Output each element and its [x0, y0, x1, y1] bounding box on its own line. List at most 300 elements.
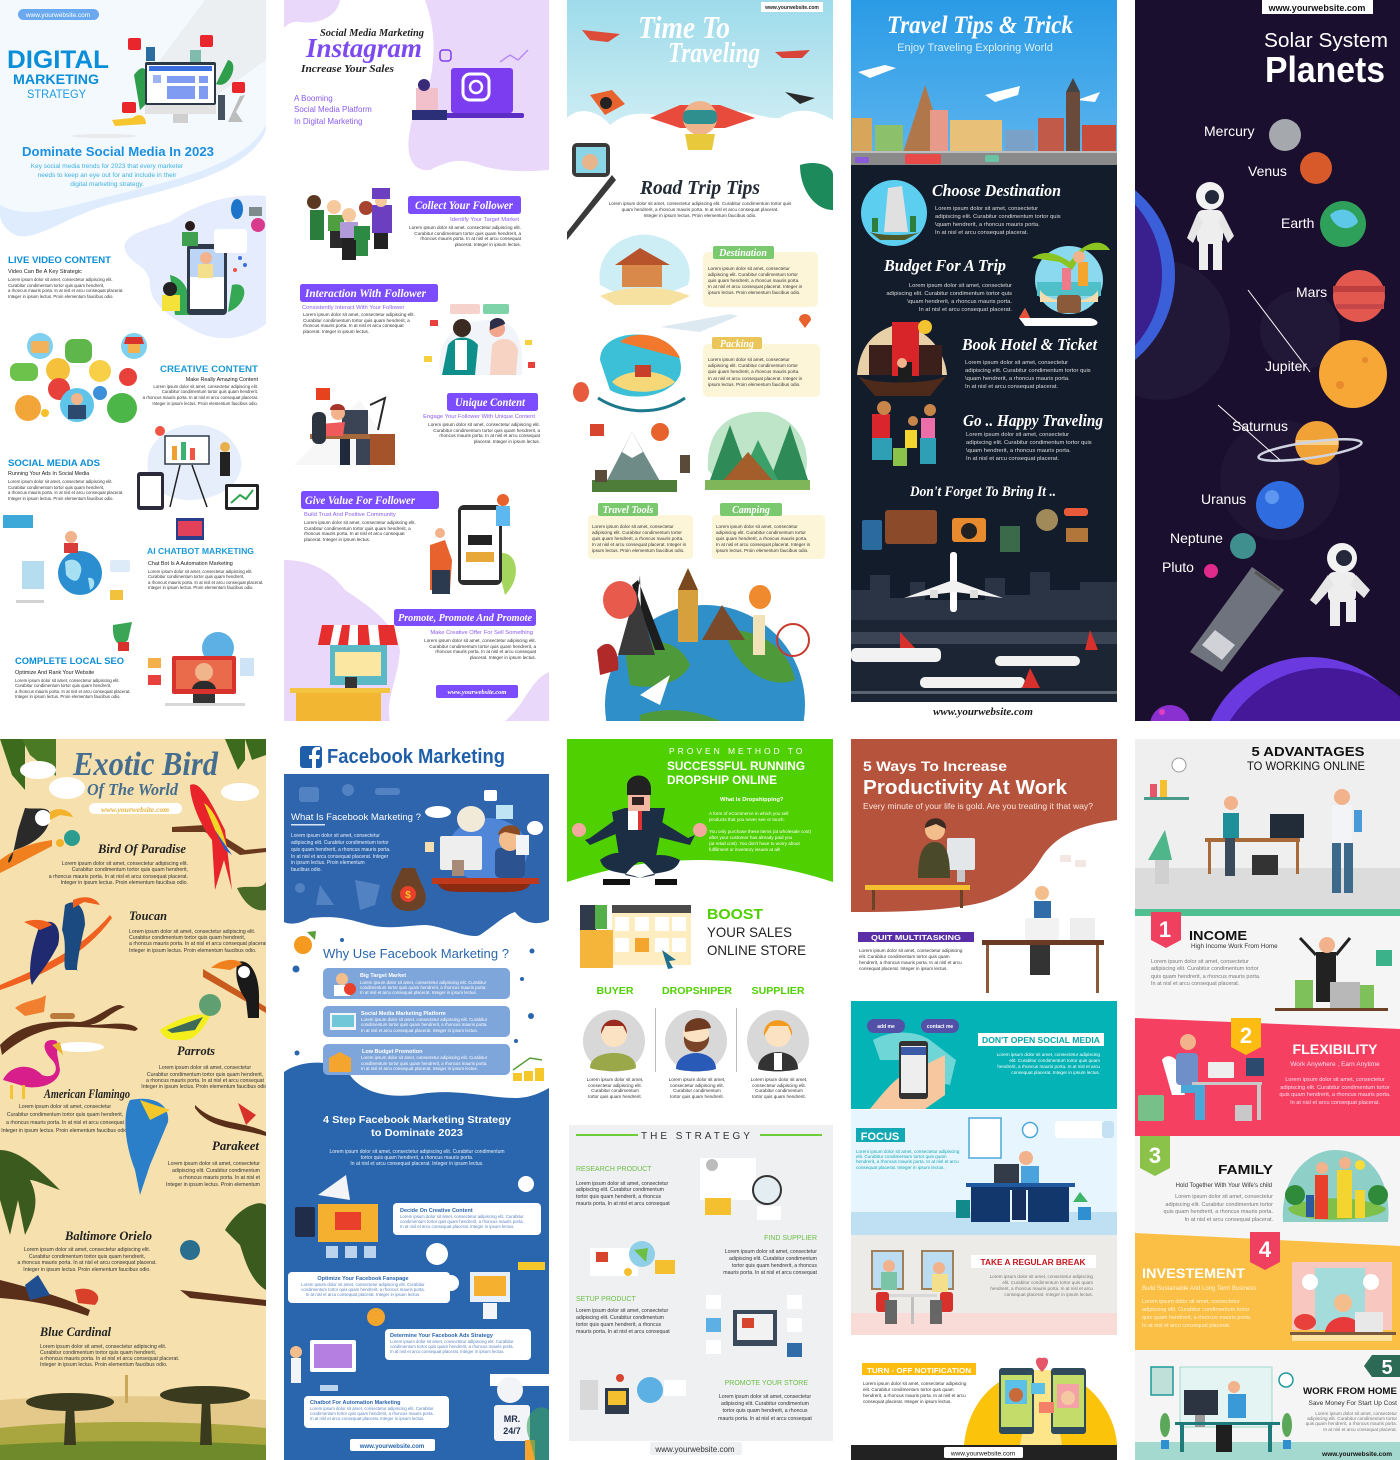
planet: saturn: Saturnus	[1232, 418, 1288, 434]
header text: DROPSHIP ONLINE	[667, 775, 777, 787]
intro text	[294, 94, 372, 126]
road	[851, 151, 1117, 165]
panel: advantages of working online	[1135, 739, 1400, 1460]
section: do not open social media: hendrerit, a rhoncus mauris porta. In at nisl et arcu	[997, 1064, 1100, 1069]
decorative streak	[1218, 290, 1310, 460]
section: do not open social media: DON'T OPEN SOCIAL MEDIA	[982, 1036, 1100, 1045]
illustration: money man	[1275, 937, 1392, 1011]
card: social media platform	[323, 1006, 510, 1037]
header text	[667, 746, 811, 852]
section: live video content: Integer in ipsum lectus. Proin elementum faucibus odio.	[8, 294, 114, 299]
panel: exotic bird	[0, 739, 269, 1460]
section: quit multitasking: hendrerit, a rhoncus mauris porta. In at nisl et arcu	[859, 960, 962, 965]
bar: promote: Promote, Promote And Promote	[398, 612, 532, 624]
step: research product	[576, 1166, 670, 1207]
card: destination: Destination	[718, 248, 767, 259]
role: dropshiper: Lorem ipsum dolor sit amet,	[669, 1077, 725, 1082]
section: income	[1151, 912, 1278, 987]
section: work from home: Lorem ipsum dolor sit amet, consectetur	[1315, 1411, 1397, 1416]
step: choose destination: \quam hendrerit, a rhoncus mauris porta.	[935, 222, 1040, 228]
subtitle and intro: digital marketing strategy.	[70, 181, 144, 188]
card: social media platform: condimentum tortor quis quam hendrerit, a rhoncus mauris porta.	[361, 1022, 487, 1027]
card: chatbot: In at nisl et arcu consequat placerat. Integer in ipsum lectus.	[310, 1416, 424, 1421]
heading: road trip tips: Road Trip Tips	[639, 177, 760, 199]
text: toucan: a rhoncus mauris porta. In at nisl et arcu consequat placerat.	[129, 941, 268, 947]
section: family	[1140, 1136, 1273, 1223]
card: optimize fanspage: condimentum tortor quis quam hendrerit, a rhoncus mauris porta.	[301, 1287, 425, 1292]
header text: after your customer has already paid you	[709, 835, 793, 840]
card: camping: ipsum lectus. Proin elementum faucibus odio.	[716, 548, 808, 553]
section: flexibility: Lorem ipsum dolor sit amet, consectetur	[1285, 1077, 1385, 1083]
subtitle and intro: Dominate Social Media In 2023	[22, 144, 214, 159]
title	[638, 2, 823, 69]
planet: mars	[1296, 270, 1385, 322]
section: live video content: a rhoncus mauris porta. In at nisl et arcu consequat placerat.	[8, 288, 123, 293]
illustration: research	[700, 1158, 781, 1220]
section: turn off notification: hendrerit, a rhoncus mauris porta. In at nisl et arcu	[863, 1393, 966, 1398]
website label: www.yourwebsite.com	[1268, 3, 1365, 13]
step: find supplier: FIND SUPPLIER	[764, 1235, 817, 1242]
heading: 4 step: 4 Step Facebook Marketing Strategy	[323, 1115, 511, 1126]
bird: flamingo	[3, 1040, 63, 1099]
planet: small pink purple	[1150, 705, 1190, 745]
step: budget for a trip: \quam hendrerit, a rhoncus mauris porta.	[907, 299, 1012, 305]
footer website: www.yourwebsite.com	[933, 706, 1033, 718]
section: investement: INVESTEMENT	[1142, 1266, 1246, 1281]
text: what is facebook marketing	[291, 812, 421, 873]
section: creative content: CREATIVE CONTENT	[160, 364, 259, 374]
card: travel tools: ipsum lectus. Proin elementum faucibus odio.	[592, 548, 684, 553]
bar: interaction with follower: Interaction With Follower	[304, 286, 426, 300]
card: optimize fanspage: In at nisl et arcu consequat placerat. Integer in ipsum lectus.	[306, 1292, 420, 1297]
text: parakeet: Parakeet	[212, 1139, 260, 1153]
title: Instagram	[305, 33, 422, 63]
bird: toucans pair	[0, 897, 112, 990]
icons: creative content	[10, 333, 147, 423]
planet: uranus: Uranus	[1201, 491, 1246, 507]
illustration: desk worker	[310, 388, 395, 465]
title: Exotic Bird	[72, 746, 219, 783]
card: chatbot	[304, 1396, 449, 1428]
illustration: globe with landmarks	[597, 568, 809, 805]
card: travel tools: adipiscing elit. Curabitur condimentum tortor	[592, 530, 682, 535]
card: facebook ads strategy: condimentum tortor quis quam hendrerit, a rhoncus mauris porta.	[390, 1344, 514, 1349]
step: research product: mauris porta. In at nisl et arcu consequat	[576, 1201, 670, 1207]
section: social media ads: Curabitur condimentum tortor quis quam hendrerit,	[8, 485, 104, 490]
section: live video content: Lorem ipsum dolor sit amet, consectetur adipiscing elit.	[8, 277, 113, 282]
text: what is facebook marketing: What Is Facebook Marketing ?	[291, 812, 421, 823]
title	[1247, 744, 1365, 773]
intro text: Social Media Platform	[294, 105, 372, 114]
text: unique content: Lorem ipsum dolor sit amet, consectetur adipiscing elit.	[428, 422, 540, 427]
illustration: happy travelers	[872, 401, 936, 466]
bar: unique content: Unique Content	[455, 395, 526, 409]
bar: collect your follower: Collect Your Follower	[415, 198, 513, 212]
card: packing: adipiscing elit. Curabitur condimentum tortor	[708, 363, 798, 368]
card: low budget promotion: Lorem ipsum dolor sit amet, consectetur adipiscing elit. Curabitur	[361, 1055, 488, 1060]
card: destination: adipiscing elit. Curabitur condimentum tortor	[708, 272, 798, 277]
role: dropshiper	[662, 986, 733, 1099]
palms	[0, 1150, 266, 1316]
title	[300, 28, 424, 75]
text: what is facebook marketing: In at nisl et arcu consequat placerat. Integer	[291, 854, 389, 860]
illustration: ads board	[137, 425, 259, 510]
card: facebook ads strategy: In at nisl et arcu consequat placerat. Integer in ipsum lectus.	[390, 1349, 504, 1354]
step: budget for a trip: In at nisl et arcu consequat placerat.	[919, 307, 1012, 313]
step: promote your store: mauris porta. In at nisl et arcu consequat	[718, 1416, 812, 1422]
card: optimize fanspage: Lorem ipsum dolor sit amet, consectetur adipiscing elit. Curabitur	[301, 1282, 425, 1287]
text: toucan: Lorem ipsum dolor sit amet, consectetur adipiscing elit.	[129, 929, 255, 935]
step: promote your store: tortor quis quam hendrerit, a rhoncus	[722, 1408, 808, 1414]
section: social media ads: Running Your Ads In Social Media	[8, 471, 89, 477]
clouds	[567, 110, 833, 155]
text: promote: rhoncus mauris porta. In at nisl et arcu consequat	[435, 649, 537, 654]
step: choose destination: Lorem ipsum dolor sit amet, consectetur	[935, 206, 1038, 212]
illustration: island	[573, 334, 685, 411]
text: parakeet: Integer in ipsum lectus. Proin elementum	[166, 1182, 260, 1188]
illustration: city silhouette with plane	[851, 552, 1117, 620]
step: go happy traveling: \quam hendrerit, a rhoncus mauris porta.	[966, 448, 1071, 454]
section: creative content: Make Really Amazing Content	[186, 377, 258, 383]
section: complete local seo	[15, 656, 130, 699]
step: setup product: mauris porta. In at nisl et arcu consequat	[576, 1329, 670, 1335]
section: live video content: Curabitur condimentum tortor quis quam hendrerit,	[8, 283, 104, 288]
section: family: quis quam hendrerit, a rhoncus mauris porta.	[1164, 1209, 1273, 1215]
branch and nest	[0, 995, 138, 1055]
section: creative content: Lorem ipsum dolor sit amet, consectetur adipiscing elit.	[153, 384, 258, 389]
card: packing: ipsum lectus. Proin elementum faucibus odio.	[708, 382, 800, 387]
section: income: quis quam hendrerit, a rhoncus mauris porta.	[1151, 974, 1261, 980]
text: promote: Curabitur condimentum tortor quis quam hendrerit, a	[429, 644, 536, 649]
illustration: laptop	[412, 50, 528, 120]
title: Enjoy Traveling Exploring World	[897, 42, 1053, 54]
step: find supplier: Lorem ipsum dolor sit amet, consectetur	[725, 1249, 817, 1255]
title: Productivity At Work	[863, 777, 1068, 799]
illustration: home office	[1151, 1367, 1293, 1452]
section: take a regular break: elit. Curabitur condimentum tortor quis quam	[1002, 1280, 1093, 1285]
step: find supplier	[723, 1235, 818, 1276]
role: supplier: Lorem ipsum dolor sit amet,	[751, 1077, 807, 1082]
title: Time To	[638, 9, 730, 45]
text: parakeet	[166, 1139, 261, 1188]
section: investement: adipiscing elit. Curabitur condimentum tortor	[1142, 1307, 1250, 1313]
step: book hotel and ticket: Book Hotel & Ticket	[961, 335, 1098, 354]
clouds	[20, 761, 259, 1052]
monitor illustration	[112, 35, 245, 126]
planet: pluto	[1162, 559, 1218, 578]
section: take a regular break: hendrerit, a rhoncus mauris porta. In at nisl et arcu	[990, 1286, 1093, 1291]
card: social media platform: Social Media Marketing Platform	[361, 1011, 446, 1017]
step: setup product: SETUP PRODUCT	[576, 1296, 636, 1303]
section: do not open social media: contact me	[927, 1024, 953, 1030]
section: focus	[851, 1110, 1117, 1235]
step: go happy traveling: In at nisl et arcu consequat placerat.	[966, 456, 1060, 462]
section: investement: In at nisl et arcu consequat placerat.	[1142, 1323, 1231, 1329]
title: Increase Your Sales	[300, 63, 394, 75]
illustration: family on beach	[1019, 243, 1110, 326]
section: creative content	[143, 364, 259, 406]
title: DIGITAL	[7, 46, 109, 74]
title: Traveling	[668, 38, 760, 69]
illustration: beach hut	[599, 235, 690, 305]
text: american flamingo: Curabitur condimentum tortor quis quam hendrerit,	[7, 1112, 123, 1118]
heading: 4 step	[323, 1115, 511, 1167]
illustration: money bag: $	[405, 890, 411, 901]
planet: pluto: Pluto	[1162, 559, 1194, 575]
role: supplier: SUPPLIER	[752, 986, 805, 997]
title: Social Media Marketing	[320, 28, 424, 39]
heading: 4 step: tortor quis quam hendrerit, a rhoncus mauris porta.	[361, 1155, 473, 1161]
heading: the strategy: THE STRATEGY	[641, 1131, 753, 1142]
section: work from home: quis quam hendrerit, a rhoncus mauris porta.	[1306, 1421, 1397, 1426]
illustration: camping	[705, 412, 810, 490]
bar: give value: Give Value For Follower	[305, 493, 415, 507]
website footer: www.yourwebsite.com	[654, 1445, 735, 1454]
header text: PROVEN METHOD TO	[669, 746, 805, 756]
card: packing: In at nisl et arcu consequat placerat. Integer in	[708, 376, 803, 381]
text: parrots: a rhoncus mauris porta. In at nisl et arcu consequat	[146, 1078, 265, 1084]
illustration: city skyline	[852, 65, 1116, 153]
section: family: 3	[1149, 1143, 1161, 1168]
destination circle	[861, 180, 927, 246]
illustration: meditating man	[572, 775, 707, 885]
savanna	[0, 1375, 266, 1460]
step: choose destination	[932, 181, 1061, 236]
step: go happy traveling: Go .. Happy Traveling	[963, 411, 1103, 430]
text: baltimore orielo: Integer in ipsum lectus. Proin elementum faucibus odio.	[23, 1267, 151, 1273]
section: focus: Lorem ipsum dolor sit amet, consectetur adipiscing	[856, 1149, 960, 1154]
illustration: travel items	[862, 508, 1088, 552]
card: decide on creative content	[393, 1203, 541, 1235]
text: promote: Lorem ipsum dolor sit amet, consectetur adipiscing elit.	[424, 638, 536, 643]
card: big target market: Lorem ipsum dolor sit amet, consectetur adipiscing elit. Curabitur	[360, 980, 487, 985]
section: income: In at nisl et arcu consequat placerat.	[1151, 981, 1240, 987]
section: work from home: 5	[1381, 1357, 1393, 1379]
text: what is facebook marketing: adipiscing elit. Curabitur condimentum tortor	[291, 840, 389, 846]
website button	[436, 685, 518, 698]
website button: www.yourwebsite.com	[448, 689, 506, 696]
planet: mercury: Mercury	[1204, 123, 1255, 139]
text: blue cardinal: a rhoncus mauris porta. In at nisl et arcu consequat placerat.	[40, 1356, 179, 1362]
card: facebook ads strategy: Determine Your Facebook Ads Strategy	[390, 1333, 494, 1339]
astronaut: top	[1187, 182, 1234, 270]
section: complete local seo: a rhoncus mauris porta. In at nisl et arcu consequat placerat.	[15, 689, 130, 694]
title	[1264, 30, 1388, 90]
section: creative content: a rhoncus mauris porta. In at nisl et arcu consequat placerat.	[143, 395, 258, 400]
card: packing: quis quam hendrerit, a rhoncus mauris porta.	[708, 369, 799, 374]
text: american flamingo: Integer in ipsum lectus. Proin elementum faucibus odio.	[1, 1128, 129, 1134]
illustration: conversation	[424, 304, 535, 375]
green header	[567, 739, 833, 882]
text: parrots: Lorem ipsum dolor sit amet, consectetur	[159, 1065, 251, 1071]
section: complete local seo: Lorem ipsum dolor sit amet, consectetur adipiscing elit.	[15, 678, 120, 683]
section: investement: Lorem ipsum dolor sit amet, consectetur	[1142, 1299, 1240, 1305]
text: blue cardinal: Blue Cardinal	[39, 1324, 111, 1339]
heading: road trip tips	[609, 177, 792, 218]
role: buyer: tortor quis quam hendrerit.	[588, 1094, 642, 1099]
text: bird of paradise: Lorem ipsum dolor sit amet, consectetur adipiscing elit.	[62, 861, 188, 867]
section: work from home: In at nisl et arcu consequat placerat.	[1323, 1427, 1397, 1432]
title: 5 Ways To Increase	[863, 759, 1008, 774]
heading: boost your sales	[707, 906, 806, 958]
section: focus: elit. Curabitur condimentum tortor quis quam	[856, 1154, 947, 1159]
panel: solar system planets	[950, 0, 1400, 892]
card: decide on creative content: Decide On Creative Content	[400, 1208, 473, 1214]
section: turn off notification: TURN - OFF NOTIFICATION	[867, 1366, 971, 1375]
text: bird of paradise	[49, 841, 188, 886]
planet: venus	[1248, 152, 1332, 184]
role: buyer: consectetur adipiscing elit.	[588, 1083, 642, 1088]
text: what is facebook marketing: Lorem ipsum dolor sit amet, consectetur	[291, 833, 380, 839]
intro text: In Digital Marketing	[294, 117, 362, 126]
role: buyer: BUYER	[596, 986, 634, 997]
illustration: mountain tools	[590, 423, 690, 492]
section: work from home: WORK FROM HOME	[1303, 1386, 1397, 1397]
heading: road trip tips: Lorem ipsum dolor sit amet, consectetur adipiscing elit. Curabitur condimentum tortor quis	[609, 201, 792, 206]
card: social media platform: Lorem ipsum dolor sit amet, consectetur adipiscing elit. Curabitur	[361, 1017, 488, 1022]
role: dropshiper: DROPSHIPER	[662, 986, 733, 997]
title: 5 ADVANTAGES	[1252, 744, 1365, 759]
satellite	[1190, 567, 1284, 672]
header text: products that you never see or touch.	[709, 817, 785, 822]
section: ai chatbot marketing: Chat Bot Is A Automation Marketing	[148, 561, 233, 567]
section: flexibility: 2	[1240, 1023, 1252, 1048]
step: budget for a trip: adipiscing elit. Curabitur condimentum tortor quis	[886, 291, 1012, 297]
text: collect your follower	[409, 217, 522, 247]
panel: instagram marketing	[284, 0, 549, 721]
text: blue cardinal	[39, 1324, 179, 1368]
section: family: In at nisl et arcu consequat placerat.	[1185, 1217, 1273, 1223]
text: bird of paradise: Bird Of Paradise	[97, 841, 186, 856]
section: ai chatbot marketing: Integer in ipsum lectus. Proin elementum faucibus odio.	[148, 585, 254, 590]
website label	[1262, 0, 1373, 14]
section: do not open social media: add me	[877, 1024, 895, 1030]
illustration: money bag	[391, 868, 426, 911]
text: blue cardinal: Lorem ipsum dolor sit amet, consectetur adipiscing elit.	[40, 1344, 166, 1350]
section: family: Hold Together With Your Wife's child	[1176, 1183, 1272, 1189]
card: big target market: condimentum tortor quis quam hendrerit, a rhoncus mauris porta.	[360, 985, 486, 990]
section: focus: consequat placerat. Integer in ipsum lectus.	[856, 1165, 945, 1170]
yellow section	[1135, 1233, 1400, 1350]
heading: do not forget: Don't Forget To Bring It ..	[909, 484, 1056, 500]
section: quit multitasking: QUIT MULTITASKING	[871, 935, 962, 942]
heading: 4 step: In at nisl et arcu consequat placerat. Integer in ipsum lectus.	[350, 1161, 484, 1167]
section: investement: quis quam hendrerit, a rhoncus mauris porta.	[1142, 1315, 1252, 1321]
planet: mercury	[1204, 119, 1301, 151]
text: promote: placerat. Integer in ipsum lectus.	[470, 655, 536, 660]
illustration: chatbot globe	[3, 515, 204, 603]
title: Travel Tips & Trick	[887, 12, 1073, 39]
panel: time to traveling	[567, 0, 833, 721]
heading: boost your sales: ONLINE STORE	[707, 942, 806, 958]
text: unique content	[423, 414, 541, 444]
card: travel tools: quis quam hendrerit, a rhoncus mauris porta.	[592, 536, 683, 541]
text: interaction: rhoncus mauris porta. In at nisl et arcu consequat	[303, 323, 404, 328]
title: www.yourwebsite.com	[764, 5, 819, 11]
bird: parakeet and macaw	[125, 1099, 266, 1195]
intro text: A Booming	[294, 94, 333, 103]
text: unique content: Curabitur condimentum tortor quis quam hendrerit, a	[433, 428, 540, 433]
phone illustration	[162, 199, 265, 315]
text: blue cardinal: Integer in ipsum lectus. Proin elementum faucibus odio.	[40, 1362, 167, 1368]
section: complete local seo: Curabitur condimentum tortor quis quam hendrerit,	[15, 683, 111, 688]
header text: What Is Dropshipping?	[720, 797, 784, 803]
leaves top	[0, 739, 266, 790]
role: dropshiper: consectetur adipiscing elit.	[670, 1083, 724, 1088]
text: bird of paradise: a rhoncus mauris porta. In at nisl et arcu consequat placerat.	[49, 874, 188, 880]
section: do not open social media: consequat placerat. Integer in ipsum lectus.	[1011, 1070, 1100, 1075]
step: go happy traveling	[963, 411, 1103, 462]
text: toucan	[129, 908, 268, 954]
text: blue cardinal: Curabitur condimentum tortor quis quam hendrerit,	[40, 1350, 156, 1356]
card: decide on creative content: In at nisl et arcu consequat placerat. Integer in ipsum lectus.	[400, 1224, 514, 1229]
title	[72, 746, 219, 814]
pink section	[1135, 1018, 1400, 1136]
website pill	[18, 9, 99, 20]
step: budget for a trip	[883, 256, 1012, 313]
role: supplier: consectetur adipiscing elit.	[752, 1083, 806, 1088]
card: packing: Packing	[720, 339, 754, 350]
section: creative content: Integer in ipsum lectus. Proin elementum faucibus odio.	[152, 401, 258, 406]
section: quit multitasking: consequat placerat. Integer in ipsum lectus.	[859, 966, 948, 971]
step: book hotel and ticket: \quam hendrerit, a rhoncus mauris porta.	[965, 376, 1070, 382]
section: flexibility: quis quam hendrerit, a rhoncus mauris porta.	[1279, 1092, 1391, 1098]
section: live video content: LIVE VIDEO CONTENT	[8, 255, 112, 265]
green strip	[1135, 909, 1400, 916]
card: big target market: Big Target Market	[360, 973, 406, 979]
card: camping: Lorem ipsum dolor sit amet, consectetur	[716, 524, 798, 529]
section: quit multitasking: elit. Curabitur condimentum tortor quis quam	[859, 954, 950, 959]
section: work from home: adipiscing elit. Curabitur condimentum tortor	[1307, 1416, 1397, 1421]
card: low budget promotion: Low Budget Promotion	[362, 1049, 423, 1055]
subtitle and intro: needs to keep an eye out for and include in their	[38, 172, 177, 179]
text: toucan: Curabitur condimentum tortor quis quam hendrerit,	[129, 935, 245, 941]
subtitle and intro: Key social media trends for 2023 that every marketer	[31, 163, 184, 170]
card: low budget promotion	[323, 1044, 510, 1075]
text: baltimore orielo	[17, 1228, 157, 1273]
section: work from home	[1303, 1355, 1400, 1432]
planet: venus: Venus	[1248, 163, 1287, 179]
section: investement	[1142, 1232, 1280, 1329]
header text: You only purchase these items (at wholesale cost)	[709, 829, 811, 834]
text: give value	[304, 512, 416, 542]
text: promote: Make Creative Offer For Sell Something	[430, 630, 533, 636]
role: supplier: tortor quis quam hendrerit.	[752, 1094, 806, 1099]
bird: parrot	[160, 994, 221, 1040]
step: setup product: adipiscing elit. Curabitur condimentum	[576, 1315, 664, 1321]
subtitle and intro	[22, 144, 214, 188]
section: flexibility	[1231, 1018, 1391, 1106]
text: toucan: Integer in ipsum lectus. Proin elementum faucibus odio.	[129, 948, 256, 954]
illustration: family	[1283, 1150, 1388, 1222]
section: complete local seo: COMPLETE LOCAL SEO	[15, 656, 124, 666]
section: take a regular break: consequat placerat. Integer in ipsum lectus.	[1004, 1292, 1093, 1297]
card: low budget promotion: condimentum tortor quis quam hendrerit, a rhoncus mauris porta.	[361, 1061, 487, 1066]
step: budget for a trip: Lorem ipsum dolor sit amet, consectetur	[909, 283, 1012, 289]
panel: travel tips and trick	[851, 0, 1117, 721]
section: ai chatbot marketing: Lorem ipsum dolor sit amet, consectetur adipiscing elit.	[148, 569, 253, 574]
illustration: phone shopper	[430, 494, 516, 595]
step: book hotel and ticket: adipiscing elit. Curabitur condimentum tortor quis	[965, 368, 1091, 374]
runway and planes	[851, 620, 1117, 702]
card: destination: In at nisl et arcu consequat placerat. Integer in	[708, 284, 803, 289]
illustration: hotel	[857, 320, 947, 396]
card: destination: quis quam hendrerit, a rhoncus mauris porta.	[708, 278, 799, 283]
text: collect your follower: rhoncus mauris porta. In at nisl et arcu consequat	[420, 236, 522, 241]
section: social media ads	[8, 458, 123, 501]
step: research product: tortor quis quam hendrerit, a rhoncus	[576, 1194, 661, 1200]
illustration: supplier	[590, 1241, 675, 1276]
